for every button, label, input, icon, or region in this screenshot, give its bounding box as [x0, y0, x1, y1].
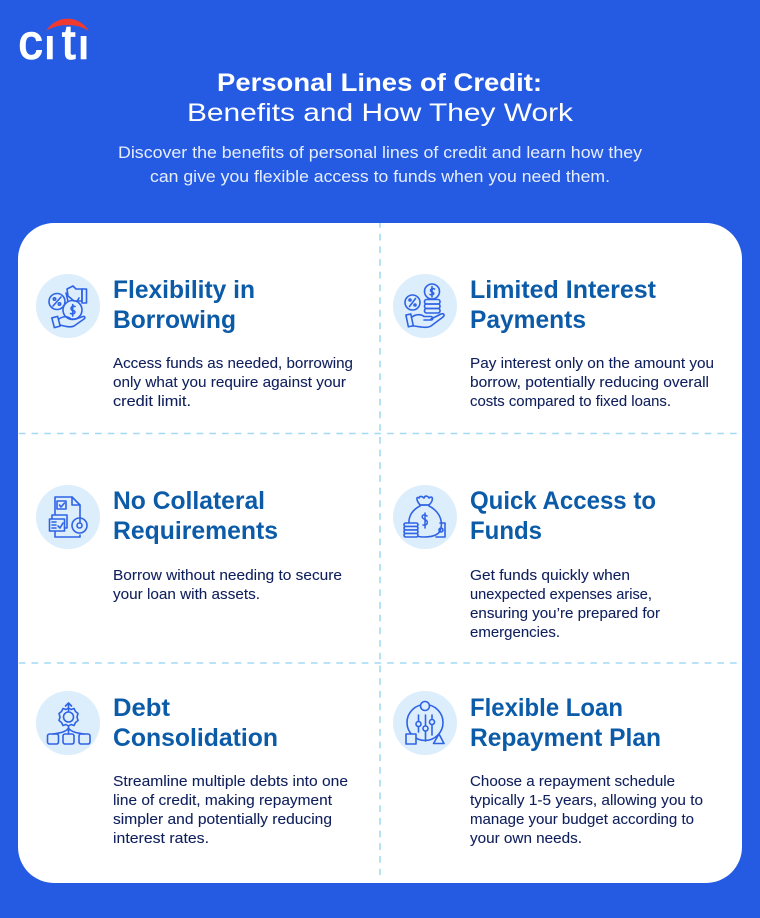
heading: Flexibility in [113, 276, 255, 304]
icon: money bag in hand with percent [36, 274, 100, 338]
heading: Flexible Loan [470, 694, 623, 722]
heading [113, 694, 278, 752]
heading: Consolidation [113, 724, 278, 752]
heading: Repayment Plan [470, 724, 661, 752]
icon: sliders in circle with shapes [393, 691, 457, 755]
intro text: Discover the benefits of personal lines of credit and learn how they [118, 143, 643, 162]
heading: Funds [470, 517, 542, 545]
description: Choose a repayment schedule [470, 773, 675, 790]
description [470, 773, 703, 847]
description: Pay interest only on the amount you [470, 355, 714, 372]
description: Get funds quickly when [470, 567, 630, 584]
description: line of credit, making repayment [113, 792, 333, 809]
title: Benefits and How They Work [187, 99, 574, 127]
description: emergencies. [470, 624, 560, 641]
description: unexpected expenses arise, [470, 586, 652, 603]
heading: Limited Interest [470, 276, 657, 304]
description [470, 355, 714, 410]
title [187, 69, 574, 127]
panel: debt consolidation [36, 691, 348, 847]
title: Personal Lines of Credit: [217, 69, 542, 97]
panel: quick access to funds [393, 485, 660, 641]
heading: Borrowing [113, 306, 236, 334]
description [470, 567, 660, 641]
description: simpler and potentially reducing [113, 811, 332, 828]
description: typically 1-5 years, allowing you to [470, 792, 703, 809]
panel: flexibility in borrowing [36, 274, 353, 410]
heading: Requirements [113, 517, 278, 545]
heading [470, 276, 657, 334]
heading: Quick Access to [470, 487, 656, 515]
logo: citi: citi [18, 16, 89, 70]
white card panel [18, 223, 742, 883]
description: interest rates. [113, 830, 209, 847]
description: your own needs. [470, 830, 582, 847]
description: costs compared to fixed loans. [470, 393, 671, 410]
description: your loan with assets. [113, 586, 260, 603]
intro text: can give you flexible access to funds when you need them. [150, 167, 610, 186]
heading: Debt [113, 694, 171, 722]
icon: coins over hand [393, 274, 457, 338]
panel: limited interest payments [393, 274, 714, 410]
intro text [118, 143, 643, 186]
icon: money bag with coins and bill [393, 485, 457, 549]
description: manage your budget according to [470, 811, 694, 828]
description: ensuring you’re prepared for [470, 605, 660, 622]
panel: no collateral requirements [36, 485, 342, 603]
icon: gear over three boxes [36, 691, 100, 755]
description [113, 773, 348, 847]
heading [470, 694, 661, 752]
panel: flexible loan repayment plan [393, 691, 703, 847]
heading [470, 487, 656, 545]
description: only what you require against your [113, 374, 346, 391]
description: Borrow without needing to secure [113, 567, 342, 584]
icon: documents with seal [36, 485, 100, 549]
description [113, 567, 342, 603]
heading [113, 487, 278, 545]
description [113, 355, 353, 410]
heading [113, 276, 255, 334]
description: Streamline multiple debts into one [113, 773, 348, 790]
description: credit limit. [113, 393, 191, 410]
description: borrow, potentially reducing overall [470, 374, 709, 391]
heading: Payments [470, 306, 586, 334]
description: Access funds as needed, borrowing [113, 355, 353, 372]
heading: No Collateral [113, 487, 265, 515]
